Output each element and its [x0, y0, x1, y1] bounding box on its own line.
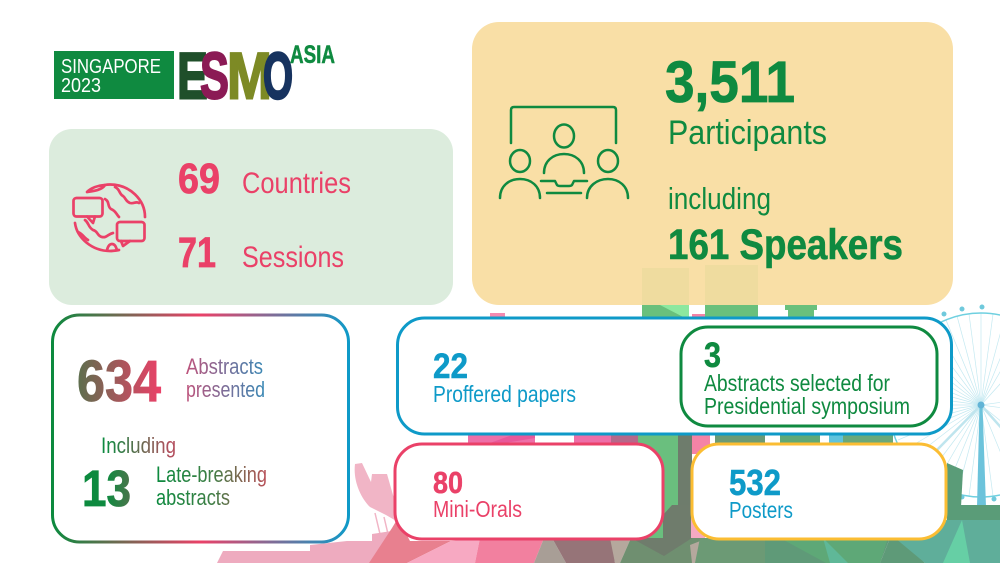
logo: ESMO Asia Singapore 2023: 2023 [61, 74, 101, 97]
stat: 634 abstracts presented [77, 349, 265, 414]
panel: participants and speakers [472, 22, 953, 305]
panel: countries and sessions [49, 129, 453, 305]
stat: 3,511 participants: 3,511 [665, 50, 795, 115]
stat: including 13 late-breaking abstracts: Including [101, 433, 176, 458]
icon: meeting participants [500, 107, 628, 198]
stat: including 161 speakers: 161 Speakers [668, 221, 903, 269]
background: Singapore skyline [217, 300, 1000, 563]
stat: 71 sessions: 71 [178, 229, 216, 277]
panel: mini-orals: 80 [433, 465, 463, 500]
stat: 3,511 participants [665, 50, 827, 152]
logo: ESMO Asia Singapore 2023: O [263, 38, 293, 112]
stat: including 161 speakers [668, 181, 903, 269]
icon: globe with speech bubbles [74, 184, 145, 251]
stat: 71 sessions [178, 229, 344, 277]
panel: posters: Posters [729, 497, 793, 523]
panel: posters [692, 444, 946, 539]
panel: mini-orals: Mini-Orals [433, 496, 522, 522]
stat: 22 proffered papers: Proffered papers [433, 381, 576, 407]
stat: 71 sessions: Sessions [242, 241, 344, 274]
panel: presidential symposium: Presidential symposium [704, 393, 910, 419]
stat: 634 abstracts presented: Abstracts [186, 354, 263, 379]
logo: ESMO Asia Singapore 2023: E [177, 38, 208, 112]
stat: 69 countries [178, 155, 351, 203]
panel: presidential symposium: Abstracts selected for [704, 370, 890, 396]
stat: 634 abstracts presented: 634 [77, 349, 161, 414]
stat: including 161 speakers: including [668, 181, 771, 216]
ferris wheel [889, 304, 1000, 507]
panel: mini-orals [395, 444, 663, 539]
art science lotus [355, 463, 398, 534]
logo: ESMO Asia Singapore 2023 [54, 38, 335, 112]
stat: 3,511 participants: Participants [668, 114, 827, 152]
mid-town buildings [468, 430, 893, 545]
stat: including 13 late-breaking abstracts: Late-breaking [156, 462, 267, 487]
panel: proffered papers [398, 318, 952, 434]
stat: including 13 late-breaking abstracts: abstracts [156, 485, 230, 510]
panel: presidential symposium [681, 327, 937, 426]
stat: 634 abstracts presented: presented [186, 377, 265, 402]
panel: abstracts presented [52, 315, 348, 542]
stat: 22 proffered papers [433, 347, 576, 407]
logo: ESMO Asia Singapore 2023: SINGAPORE [61, 55, 161, 78]
logo: ESMO Asia Singapore 2023: ASIA [290, 41, 335, 69]
low-poly ground [217, 463, 1000, 563]
stat: 69 countries: Countries [242, 167, 351, 200]
logo: ESMO Asia Singapore 2023: M [227, 38, 272, 112]
stat: including 13 late-breaking abstracts: 13 [82, 460, 131, 517]
panel: posters: 532 [729, 462, 781, 503]
stat: 22 proffered papers: 22 [433, 347, 468, 386]
logo: ESMO Asia Singapore 2023: S [200, 38, 229, 112]
stat: 69 countries: 69 [178, 155, 220, 203]
stat: including 13 late-breaking abstracts [82, 433, 267, 517]
panel: presidential symposium: 3 [704, 336, 721, 375]
